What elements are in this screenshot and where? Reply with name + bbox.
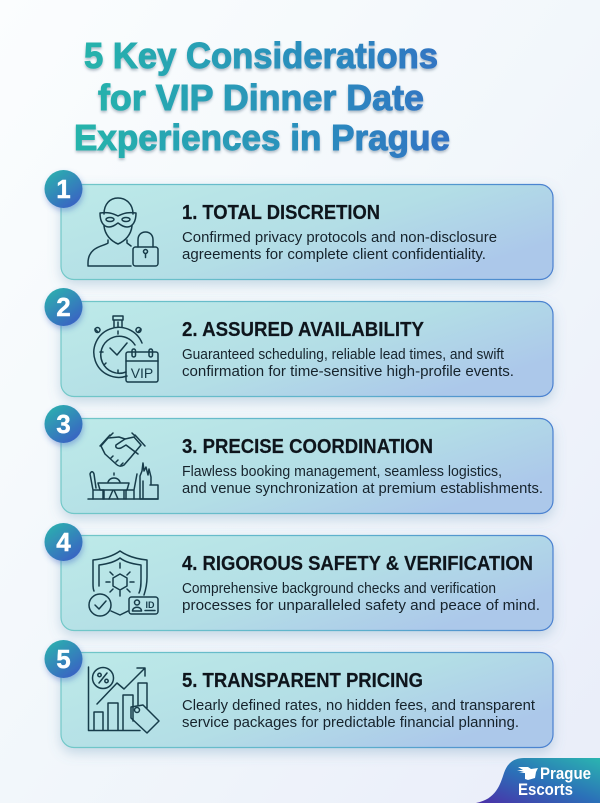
badge 5: 5 <box>56 644 71 674</box>
heading: 2. ASSURED AVAILABILITY <box>182 318 424 341</box>
text block <box>182 697 536 731</box>
text block: confirmation for time-sensitive high-profile events. <box>182 363 514 380</box>
title: 5 Key Considerations <box>84 35 438 76</box>
icon: handshake, dinner table and Prague skyline <box>88 433 158 499</box>
badge 3: 3 <box>56 409 71 439</box>
icon: shield with check and ID card <box>89 551 158 616</box>
badge 1: 1 <box>56 174 71 204</box>
icon: masked person with padlock <box>88 198 158 266</box>
title <box>74 35 450 158</box>
icon: stopwatch with VIP calendar: VIP <box>131 365 153 381</box>
badge 4 <box>44 523 82 561</box>
icon: rising bar chart, percent and price tag <box>88 667 159 733</box>
logo: Prague Escorts: Escorts <box>518 781 573 799</box>
panel: transparent pricing <box>61 652 553 748</box>
badge 2: 2 <box>56 292 71 322</box>
heading: 1. TOTAL DISCRETION <box>182 201 380 224</box>
panel: assured availability <box>61 302 553 396</box>
title: Experiences in Prague <box>74 117 450 158</box>
text block: Guaranteed scheduling, reliable lead times, and swift <box>182 346 505 363</box>
text block: processes for unparalleled safety and peace of mind. <box>182 597 540 614</box>
panel: total discretion <box>61 184 553 280</box>
badge 2 <box>44 288 82 326</box>
icon: stopwatch with VIP calendar <box>94 316 158 382</box>
title: for VIP Dinner Date <box>98 77 424 118</box>
heading: 4. RIGOROUS SAFETY & VERIFICATION <box>182 552 533 575</box>
badge 1 <box>44 170 82 208</box>
text block <box>182 346 514 380</box>
text block: Flawless booking management, seamless logistics, <box>182 463 502 480</box>
panel: rigorous safety and verification <box>61 536 553 630</box>
heading: 3. PRECISE COORDINATION <box>182 435 433 458</box>
text block: and venue synchronization at premium establishments. <box>182 480 543 497</box>
text block <box>182 229 497 263</box>
badge 5 <box>44 640 82 678</box>
icon: logo emblem <box>517 767 538 780</box>
text block: Confirmed privacy protocols and non-disclosure <box>182 229 497 246</box>
badge 4: 4 <box>56 527 71 557</box>
text block: Comprehensive background checks and verification <box>182 580 496 597</box>
logo: Prague Escorts: Prague <box>540 765 591 783</box>
logo: Prague Escorts <box>476 758 600 803</box>
text block <box>182 463 543 497</box>
text block: Clearly defined rates, no hidden fees, and transparent <box>182 697 536 714</box>
heading: 5. TRANSPARENT PRICING <box>182 669 423 692</box>
text block <box>182 580 540 614</box>
icon: shield with check and ID card: ID <box>146 600 155 610</box>
text block: service packages for predictable financial planning. <box>182 714 519 731</box>
text block: agreements for complete client confidentiality. <box>182 246 486 263</box>
panel: precise coordination <box>61 418 553 514</box>
badge 3 <box>44 405 82 443</box>
